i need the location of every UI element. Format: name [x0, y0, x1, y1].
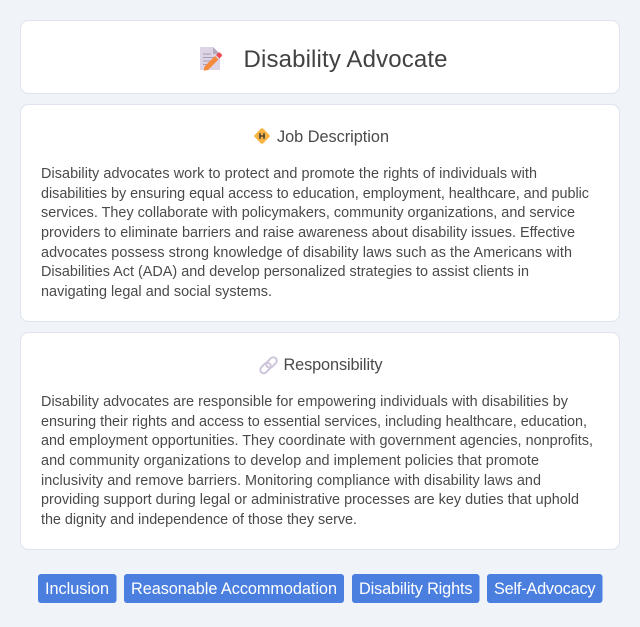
- tag: Inclusion: Inclusion: [45, 580, 109, 598]
- text block: job description: navigating legal and social systems.: [41, 284, 272, 300]
- tag: Self-Advocacy: Self-Advocacy: [494, 580, 596, 598]
- text block: responsibility: [41, 394, 593, 528]
- text block: responsibility: and community organizations to develop and implement policies that promote: [41, 453, 539, 469]
- text block: responsibility: Disability advocates are responsible for empowering individuals with disabilities by: [41, 394, 569, 410]
- tag: Inclusion: [38, 574, 116, 603]
- text block: responsibility: inclusivity and remove barriers. Monitoring compliance with disability laws and: [41, 473, 541, 489]
- heading: responsibility: Responsibility: [284, 356, 383, 374]
- text block: job description: Disabilities Act (ADA) and develop personalized strategies to assist clients in: [41, 264, 529, 280]
- tag: Disability Rights: Disability Rights: [359, 580, 472, 598]
- heading: job description: Job Description: [277, 128, 389, 146]
- tag: Self-Advocacy: [487, 574, 602, 603]
- text block: job description: providers to eliminate barriers and raise awareness about disability issues. Effective: [41, 225, 575, 241]
- panel: header: [20, 20, 620, 94]
- tag: Disability Rights: [352, 574, 480, 603]
- text block: job description: disabilities by ensuring equal access to education, employment, healthcare, and public: [41, 186, 589, 202]
- text block: job description: services. They collaborate with policymakers, community organizations, and service: [41, 205, 575, 221]
- text block: job description: [41, 166, 589, 300]
- text block: responsibility: ensuring their rights and access to essential services, including healthcare, education,: [41, 414, 587, 430]
- text block: job description: Disability advocates work to protect and promote the rights of individuals with: [41, 166, 537, 182]
- text block: responsibility: and employment opportunities. They coordinate with government agencies, nonprofits,: [41, 433, 593, 449]
- title: Disability Advocate: [244, 46, 448, 73]
- tag: Reasonable Accommodation: [124, 574, 344, 603]
- panel: responsibility: [20, 332, 620, 550]
- text block: responsibility: the dignity and independence of those they serve.: [41, 512, 357, 528]
- icon: document with pencil: [200, 47, 222, 71]
- tag: Reasonable Accommodation: Reasonable Accommodation: [131, 580, 337, 598]
- icon: diamond road sign: [254, 128, 270, 144]
- panel: job description: [20, 104, 620, 322]
- text block: responsibility: providing support during legal or administrative processes are key duties that uphold: [41, 492, 579, 508]
- icon: chain link: [259, 356, 278, 375]
- text block: job description: advocates possess strong knowledge of disability laws such as the Americans with: [41, 245, 572, 261]
